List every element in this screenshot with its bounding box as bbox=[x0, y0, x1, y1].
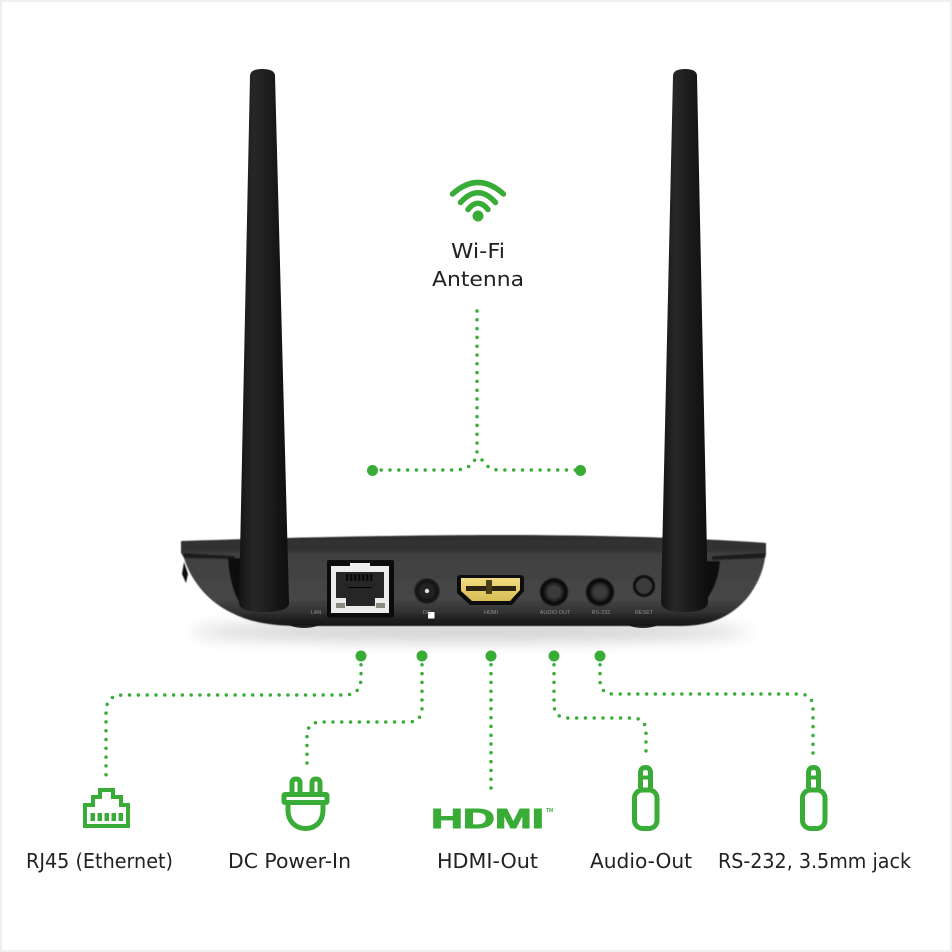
reset button bbox=[633, 575, 655, 597]
connector: audio bbox=[548, 650, 646, 756]
router bbox=[181, 69, 766, 641]
label: HDMI-Out: HDMI-Out bbox=[437, 849, 538, 873]
port labels: DC bbox=[423, 610, 431, 616]
router feet bbox=[287, 616, 660, 628]
router body bbox=[181, 535, 766, 626]
icon: HDMI logo: TM bbox=[546, 808, 553, 814]
label: RJ45: RJ45 (Ethernet) bbox=[26, 849, 173, 873]
icon: HDMI logo: HDMI bbox=[431, 803, 544, 834]
port labels: RS-232 bbox=[592, 610, 610, 616]
icon: HDMI logo bbox=[431, 803, 553, 834]
port labels: AUDIO OUT bbox=[540, 610, 571, 616]
port labels: HDMI bbox=[484, 610, 498, 616]
icon: power plug bbox=[284, 779, 327, 828]
heading: Wi-Fi Antenna: Wi-Fi bbox=[451, 239, 505, 263]
RS-232 port bbox=[586, 578, 614, 606]
port labels bbox=[311, 610, 654, 616]
label: Audio-Out: Audio-Out bbox=[590, 849, 692, 873]
icon: RS-232 jack bbox=[802, 768, 825, 828]
connector: RJ45 bbox=[106, 650, 366, 775]
icon: RJ45 bbox=[85, 790, 128, 826]
connector: HDMI bbox=[486, 650, 496, 789]
right antenna bbox=[661, 69, 708, 612]
LAN port bbox=[327, 560, 394, 618]
connector: RS-232 bbox=[594, 650, 813, 756]
left antenna bbox=[239, 69, 289, 612]
HDMI port bbox=[457, 575, 524, 605]
heading: Wi-Fi Antenna bbox=[432, 239, 524, 291]
DC port bbox=[414, 578, 440, 618]
audio out port bbox=[540, 578, 568, 606]
connector: Wi-Fi antenna to both antennas bbox=[367, 311, 586, 476]
port labels: LAN bbox=[311, 610, 321, 616]
label: DC Power-In: DC Power-In bbox=[228, 849, 351, 873]
icon: wi-fi bbox=[452, 182, 504, 222]
heading: Wi-Fi Antenna: Antenna bbox=[432, 267, 524, 291]
connector: DC power bbox=[307, 650, 428, 768]
label: RS-232: RS-232, 3.5mm jack bbox=[718, 849, 911, 873]
icon: audio jack bbox=[634, 768, 657, 828]
port labels: RESET bbox=[635, 610, 654, 616]
